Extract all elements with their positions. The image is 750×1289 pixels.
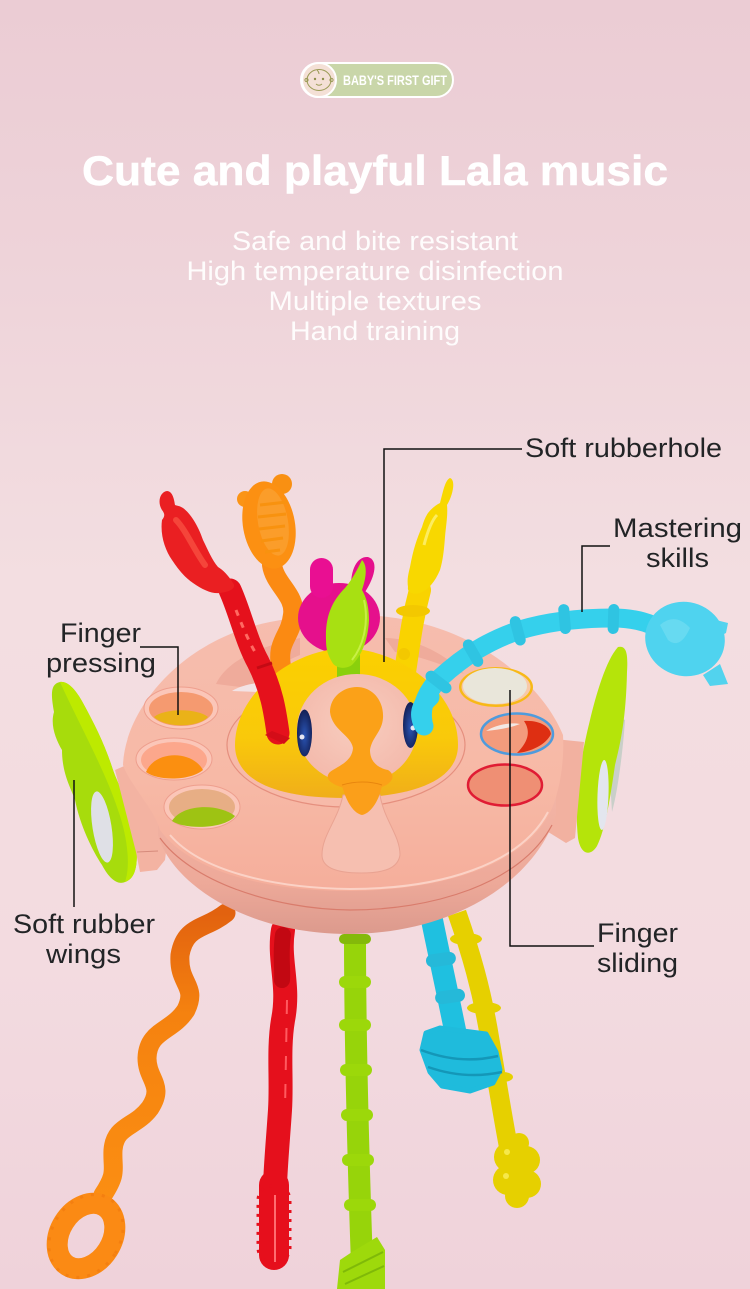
- callout: mastering skills: Mastering: [613, 513, 742, 543]
- callout: finger sliding: Finger: [597, 918, 678, 948]
- hole: green button: [164, 785, 240, 829]
- lower tentacle: red: [258, 930, 290, 1270]
- tentacle: orange bear head: [236, 474, 302, 672]
- tentacle: green leaf: [326, 560, 369, 683]
- dome: [235, 648, 458, 798]
- hole: blue ring: [481, 714, 553, 754]
- title: Cute and playful Lala music: [82, 147, 668, 194]
- right eye: [403, 702, 418, 748]
- tentacle: magenta bunny: [298, 557, 380, 653]
- lower tentacle: blue with ridged grip: [421, 920, 502, 1091]
- blue tentacle base: [421, 697, 430, 726]
- lower tentacle: yellow: [450, 913, 541, 1208]
- feature list: [186, 226, 564, 346]
- side tabs: [115, 763, 170, 872]
- callout: finger pressing: [46, 618, 178, 715]
- feature list: High temperature disinfection: [186, 256, 564, 286]
- lower shell: [158, 790, 556, 934]
- left eye: [297, 710, 312, 756]
- callout: soft rubber wings: Soft rubber: [13, 909, 155, 939]
- rear slot: [216, 638, 300, 688]
- right wing: [577, 647, 627, 853]
- crest and beak: [328, 687, 393, 788]
- stand neck: [322, 795, 400, 873]
- tentacle: red: [160, 491, 290, 744]
- lower tentacle: orange wavy ring: [34, 913, 226, 1289]
- toy body: [115, 615, 584, 934]
- badge: baby's first gift: [301, 63, 453, 97]
- callout: mastering skills: [582, 513, 742, 612]
- hole: yellow button: [144, 687, 218, 729]
- callout: soft rubberhole: Soft rubberhole: [525, 433, 722, 463]
- left wing: [52, 682, 137, 883]
- hole: white button with yellow ring: [459, 667, 533, 707]
- callout: soft rubber wings: wings: [45, 939, 121, 969]
- callout: soft rubber wings: [13, 780, 155, 969]
- groove around dome: [227, 683, 465, 807]
- product illustration: pull-string toy: [34, 474, 733, 1289]
- hole: red ring: [468, 764, 542, 806]
- badge: baby's first gift: BABY'S FIRST GIFT: [343, 72, 447, 88]
- lower tentacle: green: [337, 934, 385, 1289]
- callout: mastering skills: skills: [646, 543, 709, 573]
- tentacle: blue with cat teether: [422, 593, 733, 722]
- callout: finger sliding: sliding: [597, 948, 678, 978]
- hole: orange button: [136, 738, 212, 780]
- feature list: Hand training: [290, 316, 460, 346]
- duck head: [297, 674, 418, 815]
- top plate: [123, 615, 563, 891]
- callout: finger sliding: [510, 690, 678, 978]
- feature list: Multiple textures: [268, 286, 482, 316]
- callout: soft rubberhole: [384, 433, 722, 662]
- tentacle: yellow: [396, 478, 453, 672]
- feature list: Safe and bite resistant: [232, 226, 519, 256]
- callout: finger pressing: pressing: [46, 648, 156, 678]
- callout: finger pressing: Finger: [60, 618, 141, 648]
